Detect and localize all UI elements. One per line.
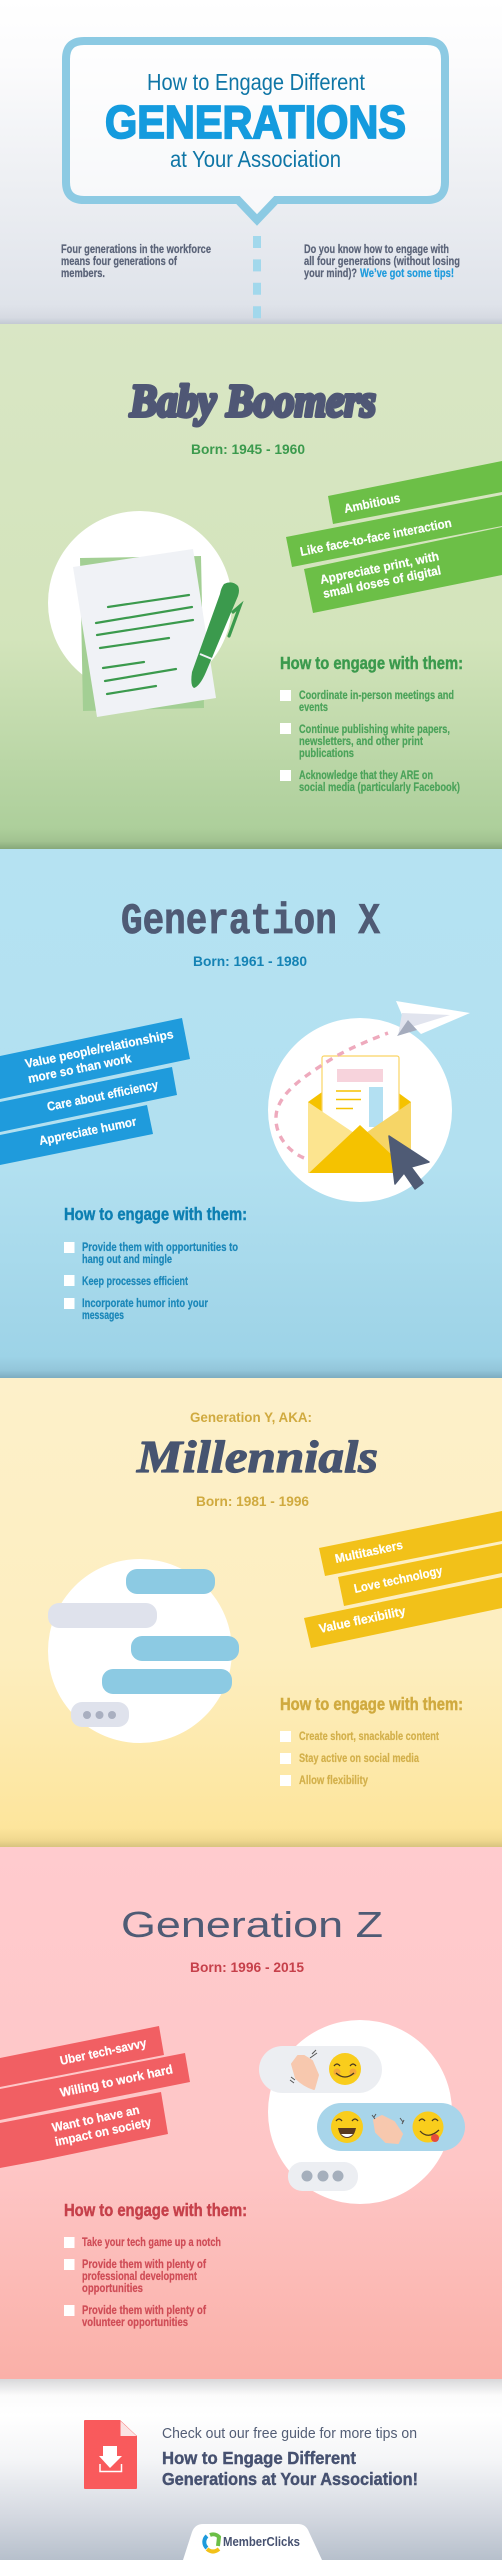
icon: paper and pen — [48, 511, 240, 717]
panel: generation x — [0, 849, 502, 1378]
checklist: Incorporate humor into your — [82, 1298, 208, 1310]
ribbon: multitaskers: Multitaskers — [334, 1538, 404, 1566]
ribbon: ambitious: Ambitious — [343, 491, 401, 516]
ribbon: impact — [0, 2092, 168, 2168]
ribbon: face-to-face — [286, 495, 502, 567]
checklist: Continue publishing white papers, — [299, 724, 450, 736]
ribbon: technology: Love technology — [353, 1564, 444, 1596]
checklist: events — [299, 702, 328, 714]
checklist: publications — [299, 748, 354, 760]
panel: generation z — [0, 1847, 502, 2379]
heading: generation z: Generation Z — [121, 1904, 383, 1945]
checklist: newsletters, and other print — [299, 736, 423, 748]
intro text right: Do you know how to engage with — [304, 244, 449, 256]
intro text right: We’ve got some tips! — [360, 268, 454, 280]
born years: Born: 1996 - 2015 — [190, 1959, 304, 1975]
intro text left: Four generations in the workforce — [61, 244, 211, 256]
checklist: Keep processes efficient — [82, 1276, 188, 1288]
intro text left — [61, 244, 211, 280]
checklist: Provide them with plenty of — [82, 2305, 206, 2317]
call to action title: Generations at Your Association! — [162, 2469, 418, 2489]
ribbon: value people — [0, 1018, 190, 1099]
checklist: professional development — [82, 2271, 197, 2283]
heading: generation x: Generation X — [121, 897, 380, 947]
ribbon: technology — [338, 1544, 502, 1606]
checklist: Provide them with plenty of — [82, 2259, 206, 2271]
heading: baby boomers: Baby Boomers — [129, 375, 376, 426]
icon: chat bubbles — [48, 1559, 239, 1743]
call to action title: How to Engage Different — [162, 2448, 356, 2468]
ribbon: appreciate print: small doses of digital — [322, 563, 442, 601]
ribbon: impact: Want to have an — [51, 2103, 141, 2135]
ribbon: humor — [0, 1105, 153, 1165]
checklist: Coordinate in-person meetings and — [299, 690, 454, 702]
title main word: GENERATIONS — [105, 96, 406, 148]
ribbon: tech-savvy: Uber tech-savvy — [59, 2036, 148, 2068]
ribbon: tech-savvy — [0, 2026, 164, 2087]
checklist: Take your tech game up a notch — [82, 2237, 221, 2249]
eyebrow: Generation Y, AKA: — [190, 1409, 312, 1425]
checklist: opportunities — [82, 2283, 143, 2295]
ribbon: value people: more so than work — [27, 1051, 133, 1086]
logo wordmark: MemberClicks — [223, 2534, 300, 2549]
icon: download document — [84, 2420, 137, 2489]
panel: millennials — [0, 1378, 502, 1847]
panel: footer — [0, 2379, 502, 2560]
born years: Born: 1961 - 1980 — [193, 953, 307, 969]
ribbon: work hard: Willing to work hard — [59, 2062, 174, 2100]
checklist — [280, 1731, 439, 1787]
ribbon: appreciate print: Appreciate print, with — [319, 549, 440, 587]
heading: millennials: Millennials — [136, 1431, 378, 1482]
ribbon: multitaskers — [319, 1511, 502, 1576]
checklist: Stay active on social media — [299, 1753, 419, 1765]
checklist: Create short, snackable content — [299, 1731, 439, 1743]
ribbon: work hard — [0, 2053, 190, 2120]
checklist: volunteer opportunities — [82, 2317, 188, 2329]
ribbon: efficiency: Care about efficiency — [46, 1078, 159, 1114]
engage heading: How to engage with them: — [280, 1694, 463, 1714]
checklist — [64, 2237, 221, 2329]
ribbon: efficiency — [0, 1067, 177, 1132]
icon: emoji chat — [259, 2020, 465, 2204]
ribbon: flexibility: Value flexibility — [318, 1604, 407, 1636]
intro text right: all four generations (without losing — [304, 256, 460, 268]
call to action intro: Check out our free guide for more tips on — [162, 2426, 417, 2442]
ribbon: appreciate print — [304, 527, 502, 613]
ribbon: ambitious — [328, 461, 502, 524]
icon: logo mark — [204, 2534, 219, 2552]
speech bubble — [66, 41, 445, 220]
dashed connector — [253, 236, 261, 319]
logo tab — [183, 2524, 322, 2560]
checklist: messages — [82, 1310, 124, 1322]
panel: header — [0, 0, 502, 324]
title line one: How to Engage Different — [147, 69, 366, 95]
born years: Born: 1981 - 1996 — [196, 1493, 309, 1509]
ribbon: face-to-face: Like face-to-face interaction — [299, 516, 453, 559]
checklist — [64, 1242, 238, 1322]
call to action title — [162, 2448, 418, 2489]
icon: envelope and paper plane — [268, 1001, 470, 1202]
intro text right — [304, 244, 460, 280]
engage heading: How to engage with them: — [280, 653, 463, 673]
engage heading: How to engage with them: — [64, 1204, 247, 1224]
intro text right: your mind)? — [304, 268, 357, 280]
intro text left: members. — [61, 268, 105, 280]
ribbon: impact: impact on society — [54, 2115, 153, 2149]
checklist: Allow flexibility — [299, 1775, 368, 1787]
checklist: Acknowledge that they ARE on — [299, 770, 433, 782]
ribbon: value people: Value people/relationships — [24, 1027, 175, 1071]
checklist: Provide them with opportunities to — [82, 1242, 238, 1254]
born years: Born: 1945 - 1960 — [191, 441, 305, 457]
checklist: hang out and mingle — [82, 1254, 172, 1266]
title line three: at Your Association — [170, 146, 341, 172]
panel: baby boomers — [0, 324, 502, 849]
engage heading: How to engage with them: — [64, 2200, 247, 2220]
ribbon: flexibility — [304, 1577, 502, 1648]
intro text left: means four generations of — [61, 256, 177, 268]
checklist: social media (particularly Facebook) — [299, 782, 460, 794]
checklist — [280, 690, 460, 794]
ribbon: humor: Appreciate humor — [38, 1114, 138, 1148]
